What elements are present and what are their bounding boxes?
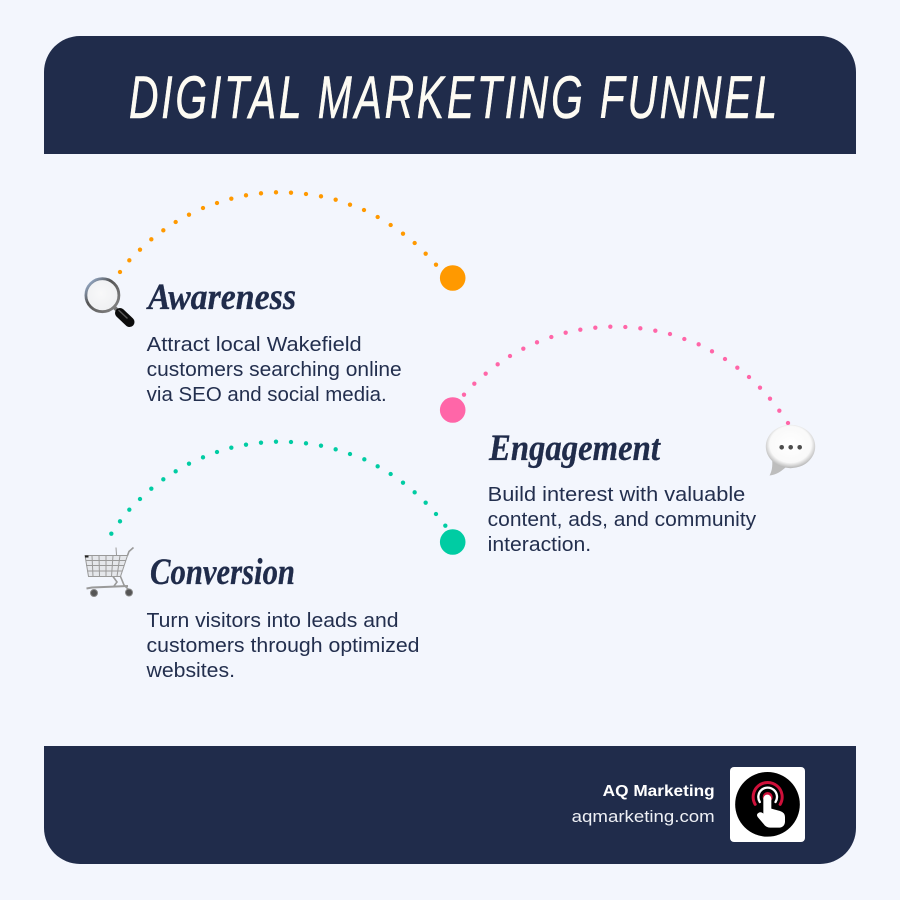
website: aqmarketing.com: [572, 808, 715, 826]
node: orange dot: [440, 265, 466, 291]
panel: engagement: [440, 324, 815, 556]
logo: [730, 767, 805, 842]
heading: engagement: Engagement: [488, 428, 662, 469]
icon: magnifying glass: [86, 279, 130, 322]
footer band: [44, 746, 856, 864]
icon: speech bubble: [766, 425, 815, 476]
heading: awareness: Awareness: [146, 277, 296, 318]
header band: [44, 36, 856, 154]
brand name: AQ Marketing: [603, 783, 715, 800]
text: awareness description: via SEO and social media.: [147, 384, 387, 406]
dotted arc: conversion: [109, 439, 447, 536]
node: green dot: [440, 529, 466, 555]
text: engagement description: [488, 484, 756, 556]
text: engagement description: content, ads, and community: [488, 509, 756, 531]
text: conversion description: customers through optimized: [146, 635, 420, 657]
text: awareness description: Attract local Wakefield: [147, 334, 362, 356]
text: engagement description: Build interest with valuable: [488, 484, 745, 506]
text: conversion description: websites.: [145, 660, 235, 682]
heading: conversion: Conversion: [150, 552, 295, 593]
text: awareness description: customers searching online: [147, 359, 402, 381]
text: awareness description: [147, 334, 402, 406]
text: conversion description: Turn visitors into leads and: [146, 610, 398, 632]
text: conversion description: [145, 610, 420, 682]
panel: conversion: [85, 439, 466, 682]
text: engagement description: interaction.: [488, 534, 591, 556]
dotted arc: awareness: [118, 190, 438, 274]
node: pink dot: [440, 397, 466, 423]
title: DIGITAL MARKETING FUNNEL: [129, 64, 777, 131]
icon: shopping cart: [85, 548, 134, 596]
dotted arc: engagement: [462, 324, 790, 425]
panel: awareness: [86, 190, 466, 406]
